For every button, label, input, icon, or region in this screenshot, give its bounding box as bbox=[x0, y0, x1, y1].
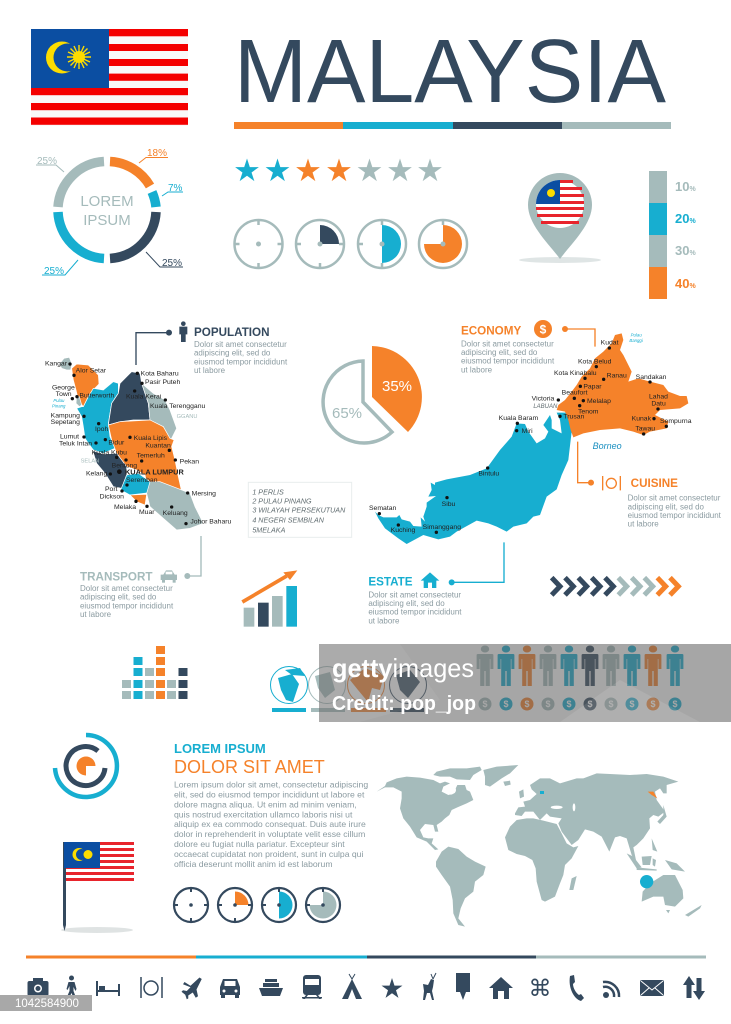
city dots bbox=[68, 362, 189, 525]
economy connector bbox=[565, 329, 595, 347]
dollar coins: $ bbox=[524, 699, 530, 709]
icon: walker bbox=[66, 976, 76, 999]
donut chart bbox=[36, 148, 183, 277]
city labels: Simanggang bbox=[423, 524, 461, 531]
city labels: Melalap bbox=[587, 398, 611, 405]
person bbox=[540, 646, 556, 686]
label 18% bbox=[139, 148, 168, 163]
city labels: Temerluh bbox=[137, 452, 165, 459]
growth chart bbox=[242, 570, 297, 627]
body text: aliquip ex ea commodo consequat. Duis aute irure bbox=[174, 819, 366, 829]
city labels: Victoria bbox=[532, 395, 555, 402]
body text: occaecat cupidatat non proident, sunt in culpa qui bbox=[174, 849, 363, 859]
state legend box: 3 WILAYAH PERSEKUTUAN bbox=[252, 507, 346, 515]
watermark logo: gettyimages bbox=[332, 653, 474, 683]
transport text bbox=[80, 584, 174, 619]
bottom icon row bbox=[28, 973, 705, 1002]
label 65%: 65% bbox=[332, 405, 362, 422]
globe orange bbox=[348, 666, 386, 712]
highlight: orange region bbox=[648, 792, 657, 798]
city labels: GGANU bbox=[177, 414, 197, 420]
city labels: George bbox=[52, 384, 75, 391]
panel: East Malaysia bbox=[368, 320, 722, 625]
city labels: Seremban bbox=[126, 477, 158, 484]
city labels: KUALA LUMPUR bbox=[125, 468, 184, 477]
body text: elit, sed do eiusmod tempor incididunt ut labore et bbox=[174, 790, 365, 800]
title: MALAYSIA bbox=[234, 22, 666, 122]
city labels: Kuala Kubu bbox=[92, 449, 127, 456]
text block: lorem ipsum bbox=[174, 741, 368, 869]
inland seas bbox=[444, 785, 575, 811]
map: Sabah bbox=[557, 333, 688, 437]
transport text: adipiscing elit, sed do bbox=[80, 593, 157, 602]
city labels: Kangar bbox=[45, 361, 68, 368]
clock orange bbox=[218, 888, 252, 922]
map pin with flag bbox=[519, 173, 601, 263]
city labels: Sempurna bbox=[660, 418, 692, 425]
label 40%: 40% bbox=[675, 276, 696, 291]
label 10%: 10% bbox=[675, 179, 696, 194]
transport connector bbox=[190, 536, 201, 576]
icon: phone bbox=[570, 975, 584, 1001]
economy text: eiusmod tempor incididunt bbox=[461, 357, 555, 366]
state legend box: 1 PERLIS bbox=[252, 488, 284, 496]
state legend box bbox=[248, 482, 352, 537]
dollar coins: $ bbox=[482, 699, 488, 709]
city labels: Kota Baharu bbox=[141, 371, 179, 378]
city labels: Sibu bbox=[442, 501, 456, 508]
city dots bbox=[378, 346, 668, 534]
estate callout bbox=[368, 542, 504, 625]
city labels: Pasir Puteh bbox=[145, 379, 180, 386]
cuisine heading: CUISINE bbox=[631, 477, 678, 490]
city labels: Johor Baharu bbox=[190, 519, 232, 526]
city labels: Kota Kinabalu bbox=[554, 370, 597, 377]
icon: car bbox=[161, 570, 177, 583]
city labels: Lahad bbox=[649, 393, 668, 400]
clock three quarters bbox=[419, 220, 467, 268]
flag: Malaysia bbox=[31, 29, 188, 126]
city labels: Tawau bbox=[635, 426, 655, 433]
body text: dolore magna aliqua. Ut enim ad minim veniam, bbox=[174, 800, 357, 810]
clock empty bbox=[234, 220, 282, 268]
watermark band bbox=[319, 644, 731, 722]
city labels: Kampung bbox=[51, 412, 80, 419]
city labels: Sematan bbox=[369, 505, 397, 512]
estate heading: ESTATE bbox=[368, 576, 413, 589]
icon: up down arrows bbox=[683, 976, 705, 1000]
clock quarter bbox=[296, 220, 344, 268]
estate text: ut labore bbox=[368, 616, 400, 625]
flag on pole bbox=[61, 842, 134, 933]
body text: officia deserunt mollit anim id est laborum bbox=[174, 859, 333, 869]
city labels: Sandakan bbox=[636, 374, 667, 381]
transport text: Dolor sit amet consectetur bbox=[80, 584, 173, 593]
city labels: Mersing bbox=[192, 490, 216, 497]
label 7% bbox=[162, 183, 183, 196]
transport text: eiusmod tempor incididunt bbox=[80, 601, 174, 610]
estate connector bbox=[454, 542, 504, 582]
city labels: Kuala Lipis bbox=[134, 435, 168, 442]
city labels: Pulau bbox=[631, 333, 642, 338]
clock blue bbox=[262, 888, 296, 922]
dollar coins: $ bbox=[503, 699, 509, 709]
population text: eiusmod tempor incididunt bbox=[194, 357, 288, 366]
city labels: Muar bbox=[139, 509, 155, 516]
transport heading: TRANSPORT bbox=[80, 571, 153, 584]
icon: person bbox=[179, 321, 187, 342]
city labels: Kudat bbox=[601, 340, 619, 347]
label 20%: 20% bbox=[675, 211, 696, 226]
watermark credit: Credit: pop_jop bbox=[332, 693, 476, 715]
estate text bbox=[368, 590, 462, 625]
economy callout bbox=[461, 320, 595, 374]
population text: Dolor sit amet consectetur bbox=[194, 340, 287, 349]
estate text: eiusmod tempor incididunt bbox=[368, 608, 462, 617]
cuisine text bbox=[628, 494, 722, 529]
state legend box: 5MELAKA bbox=[252, 527, 286, 535]
icon: ship bbox=[259, 979, 283, 996]
economy text: Dolor sit amet consectetur bbox=[461, 339, 554, 348]
person bbox=[519, 646, 535, 686]
population connector bbox=[136, 333, 168, 365]
icon: target logo bbox=[55, 735, 117, 797]
icon: cutlery bbox=[141, 977, 162, 998]
cuisine callout bbox=[578, 442, 722, 529]
clock gray bbox=[306, 888, 340, 922]
icon: house bbox=[489, 977, 513, 999]
title colour bar bbox=[234, 122, 671, 129]
person bbox=[582, 646, 598, 686]
chevrons bbox=[552, 578, 678, 595]
icon: deer bbox=[423, 973, 436, 1000]
city labels: Miri bbox=[522, 428, 533, 435]
person bbox=[477, 646, 493, 686]
label 18%: 18% bbox=[147, 148, 167, 159]
globe gray bbox=[308, 666, 346, 712]
icon: star bbox=[382, 978, 402, 998]
city labels: Kuala Kerai bbox=[126, 393, 162, 400]
label 25% dark: 25% bbox=[162, 258, 182, 269]
label 25% gray bbox=[36, 156, 64, 172]
city labels: Banggi bbox=[629, 338, 644, 343]
label 25% blue: 25% bbox=[44, 266, 64, 277]
economy heading: ECONOMY bbox=[461, 325, 521, 338]
city labels bbox=[369, 333, 692, 534]
clock empty bbox=[174, 888, 208, 922]
panel: peninsular Malaysia bbox=[45, 321, 352, 627]
icon: house bbox=[421, 572, 439, 588]
city labels: Kota Belud bbox=[578, 358, 612, 365]
economy text bbox=[461, 339, 555, 374]
city labels: Sepetang bbox=[51, 419, 80, 426]
city labels: Trusan bbox=[563, 414, 585, 421]
star rating bbox=[235, 158, 442, 181]
economy text: ut labore bbox=[461, 365, 493, 374]
city labels: Ipoh bbox=[95, 426, 108, 433]
city labels: Kuantan bbox=[145, 442, 171, 449]
population text: adipiscing elit, sed do bbox=[194, 349, 271, 358]
city labels: Pinang bbox=[52, 404, 66, 409]
globe blue bbox=[270, 666, 308, 712]
city labels: Kelang bbox=[86, 471, 107, 478]
person bbox=[498, 646, 514, 686]
label 35%: 35% bbox=[382, 378, 412, 395]
icon: bed bbox=[96, 981, 120, 996]
world map bbox=[372, 765, 702, 927]
city labels: Beaufort bbox=[562, 390, 588, 397]
label 30%: 30% bbox=[675, 243, 696, 258]
city labels: Kuching bbox=[391, 527, 416, 534]
body text: quis nostrud exercitation ullamco laboris nisi ut bbox=[174, 810, 353, 820]
bottom colour bar bbox=[26, 956, 706, 958]
clock half bbox=[358, 220, 406, 268]
subheading: LOREM IPSUM bbox=[174, 741, 266, 756]
state legend box: 4 NEGERI SEMBILAN bbox=[252, 517, 325, 525]
clock icons: top row bbox=[234, 220, 467, 268]
body text bbox=[174, 780, 368, 869]
label 25% gray: 25% bbox=[37, 156, 57, 167]
population heading: POPULATION bbox=[194, 326, 270, 339]
icon: command key: ⌘ bbox=[528, 976, 552, 1002]
city labels: Bidur bbox=[108, 439, 125, 446]
city labels: Teluk Intan bbox=[59, 441, 92, 448]
city labels: Lumut bbox=[60, 433, 79, 440]
heading: DOLOR SIT AMET bbox=[174, 757, 325, 777]
city labels: Keluang bbox=[163, 510, 188, 517]
person bbox=[561, 646, 577, 686]
donut centre label bbox=[80, 193, 134, 229]
icon: rss bbox=[603, 982, 619, 998]
label 25% blue bbox=[42, 260, 78, 277]
donut centre label: IPSUM bbox=[83, 212, 131, 229]
equalizer chart bbox=[122, 646, 188, 699]
city labels: Tenom bbox=[578, 408, 599, 415]
icon: plane bbox=[182, 978, 202, 999]
dollar coins: $ bbox=[566, 699, 572, 709]
cuisine text: eiusmod tempor incididunt bbox=[628, 511, 722, 520]
economy text: adipiscing elit, sed do bbox=[461, 348, 538, 357]
city labels: Datu bbox=[651, 401, 666, 408]
city labels: Kunak bbox=[632, 416, 652, 423]
icon: car bbox=[220, 979, 240, 998]
person bbox=[624, 646, 640, 686]
map: peninsular states bbox=[59, 357, 203, 530]
person bbox=[603, 646, 619, 686]
donut centre label: LOREM bbox=[80, 193, 134, 210]
city labels: Pekan bbox=[180, 458, 199, 465]
dollar coins: $ bbox=[545, 699, 551, 709]
map: Sarawak bbox=[375, 413, 572, 544]
estate text: Dolor sit amet consectetur bbox=[368, 590, 461, 599]
person bbox=[645, 646, 661, 686]
population text bbox=[194, 340, 288, 375]
icon: mail bbox=[640, 980, 664, 996]
city labels: Port bbox=[105, 486, 118, 493]
label 7%: 7% bbox=[168, 183, 183, 194]
highlight: blue circle bbox=[640, 875, 653, 888]
vertical percent bar bbox=[649, 171, 696, 299]
pie chart: 65 / 35 bbox=[323, 346, 422, 443]
image id tag: 1042584900 bbox=[15, 998, 79, 1010]
icon: train bbox=[302, 975, 322, 999]
city labels: Kuala Baram bbox=[499, 415, 538, 422]
city labels: Kuala Terengganu bbox=[150, 403, 206, 410]
city labels: Dickson bbox=[100, 493, 124, 500]
icon: plate and cutlery bbox=[603, 476, 620, 490]
estate text: adipiscing elit, sed do bbox=[368, 599, 445, 608]
city labels: SELAN bbox=[81, 459, 99, 465]
cuisine text: ut labore bbox=[628, 520, 659, 529]
body text: dolore eu fugiat nulla pariatur. Excepteur sint bbox=[174, 839, 345, 849]
label 25% dark bbox=[146, 252, 183, 269]
dollar coins: $ bbox=[672, 699, 678, 709]
cuisine text: adipiscing elit, sed do bbox=[628, 502, 705, 511]
city labels: LABUAN bbox=[533, 404, 558, 410]
transport text: ut labore bbox=[80, 610, 112, 619]
icon: camera bbox=[28, 978, 48, 996]
clock icons: lower row bbox=[174, 888, 340, 922]
globes row bbox=[270, 666, 426, 712]
image id tag bbox=[0, 995, 92, 1011]
cuisine connector bbox=[578, 442, 590, 483]
globe dark bbox=[390, 666, 426, 712]
state legend box: 2 PULAU PINANG bbox=[251, 497, 312, 505]
city labels: Bintulu bbox=[478, 471, 499, 478]
icon: dollar coin: $ bbox=[540, 322, 547, 336]
icon: tent bbox=[342, 974, 362, 999]
population callout bbox=[136, 321, 288, 375]
dollar coins: $ bbox=[587, 699, 593, 709]
city labels: Bentong bbox=[112, 462, 137, 469]
population text: ut labore bbox=[194, 366, 226, 375]
cuisine text: Dolor sit amet consectetur bbox=[628, 494, 721, 503]
city labels: Borneo bbox=[593, 441, 622, 451]
city labels: Melaka bbox=[114, 504, 136, 511]
body text: Lorem ipsum dolor sit amet, consectetur adipiscing bbox=[174, 780, 368, 790]
icon: map marker bbox=[456, 973, 470, 1000]
people and coins row bbox=[477, 646, 683, 710]
city labels: Butterworth bbox=[79, 392, 114, 399]
city labels: Ranau bbox=[607, 373, 627, 380]
city labels: Papar bbox=[583, 384, 602, 391]
highlight: blue spot bbox=[540, 791, 544, 794]
dollar coins bbox=[478, 698, 682, 710]
city labels: Alor Setar bbox=[76, 367, 107, 374]
dollar coins: $ bbox=[608, 699, 614, 709]
transport callout bbox=[80, 536, 201, 619]
city labels: Pulau bbox=[53, 398, 65, 403]
city labels bbox=[45, 361, 232, 526]
person bbox=[667, 646, 683, 686]
body text: dolor in reprehenderit in voluptate velit esse cillum bbox=[174, 829, 365, 839]
dollar coins: $ bbox=[629, 699, 635, 709]
dollar coins: $ bbox=[650, 699, 656, 709]
city labels: Town bbox=[56, 391, 72, 398]
